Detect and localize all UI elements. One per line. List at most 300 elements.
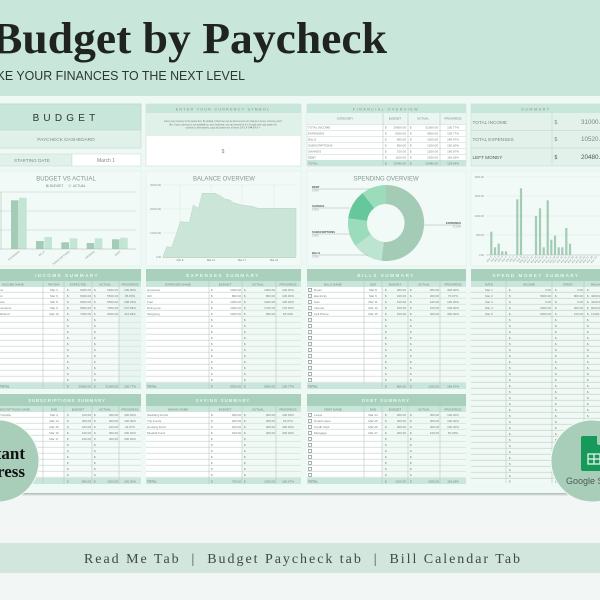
- table: debt summary: $: [385, 480, 387, 484]
- table: subscriptions summary: $: [67, 431, 69, 435]
- table: spend money summary: $$$$$$$$$$$$$$$$$$$$$$$$$$$$: [587, 318, 589, 484]
- table: spend money summary: $: [509, 306, 511, 310]
- table: expenses summary: 800.00: [266, 294, 275, 298]
- table: spend money summary: DATE: [485, 282, 493, 286]
- table: income summary: nvestors: [0, 306, 12, 310]
- table: bills summary: Internet: [314, 306, 324, 310]
- table: debt summary: $: [410, 413, 412, 417]
- table: debt summary: Loans: [314, 413, 323, 417]
- panel: financial overview: DEBT: [308, 156, 316, 160]
- table: subscriptions summary: $: [94, 419, 96, 423]
- table: debt summary: PROGRESS: [444, 408, 462, 412]
- table: bills summary: $: [385, 306, 387, 310]
- chart: spending overview donut: EXPENSES: [446, 221, 461, 225]
- table: subscriptions summary: $: [67, 480, 69, 484]
- table: income summary: $: [67, 384, 69, 388]
- table: bills summary: $: [385, 294, 387, 298]
- panel: summary: $: [554, 137, 558, 143]
- panel: financial overview: 1200.00: [427, 150, 438, 154]
- table: bills summary: 300.00: [430, 288, 439, 292]
- table: debt summary: TOTAL: [308, 480, 318, 484]
- table: income summary: PAYDAY: [48, 282, 60, 286]
- table: income summary: 108.33%: [124, 300, 136, 304]
- table: bills summary: 200.00: [430, 294, 439, 298]
- chart: balance overview: 10000.00: [150, 231, 162, 235]
- table: expenses summary: 1700.00: [264, 306, 275, 310]
- table: spend money summary: INCOME: [523, 282, 535, 286]
- footer band: [0, 543, 600, 573]
- badge: instant express: [0, 420, 39, 502]
- table: income summary: $: [67, 294, 69, 298]
- table: spend money summary: 300.00: [574, 306, 583, 310]
- table: bills summary: 800.00: [397, 384, 406, 388]
- table: subscriptions summary: 100.00: [109, 425, 118, 429]
- table: bills summary: Mar 9: [369, 294, 377, 298]
- chart: spend money bars: Mar 28: [586, 255, 594, 264]
- table: subscriptions summary: DUE: [51, 408, 57, 412]
- table: saving summary: $: [244, 425, 246, 429]
- table: saving summary: PROGRESS: [279, 408, 297, 412]
- panel: financial overview: $: [385, 150, 387, 154]
- table: spend money summary: $: [555, 288, 557, 292]
- panel: financial overview: $: [410, 144, 412, 148]
- panel: financial overview: $: [410, 132, 412, 136]
- table: spend money summary: 100.00: [574, 312, 583, 316]
- table: bills summary: 70.07%: [448, 294, 458, 298]
- table: expenses summary: $: [211, 306, 213, 310]
- table: expenses summary: $: [211, 288, 213, 292]
- chart: spend money bars: Mar 12: [526, 255, 534, 264]
- table: subscriptions summary: 300.00%: [124, 431, 136, 435]
- table: saving summary: 100.00: [232, 431, 241, 435]
- chart: balance overview: [146, 171, 301, 266]
- chart: spend money bars: 1000.00: [475, 214, 485, 218]
- table: bills summary: 1200.00: [428, 384, 439, 388]
- table: bills summary: BILLS NAME: [324, 282, 342, 286]
- table: bills summary: 100.00%: [447, 300, 459, 304]
- table: expenses summary: Gift: [147, 294, 152, 298]
- table: bills summary: 100.00: [397, 306, 406, 310]
- table: income summary: $: [67, 300, 69, 304]
- table: expenses summary: $: [244, 312, 246, 316]
- chart: spending overview donut: 5.56%: [312, 256, 320, 258]
- table: expenses summary: Dining out: [147, 306, 161, 310]
- chart: spend money bars: Mar 4: [496, 255, 504, 263]
- table: bills summary: 148.97%: [447, 384, 459, 388]
- panel: financial overview: 105.77%: [447, 132, 459, 136]
- table: saving summary: TOTAL: [147, 480, 157, 484]
- panel: financial overview: $: [385, 156, 387, 160]
- panel: financial overview: $: [410, 150, 412, 154]
- table: bills summary: 100.00: [430, 306, 439, 310]
- chart: spend money bars: Mar 8: [511, 255, 519, 263]
- panel: budget title: PAYCHECK DASHBOARD: [37, 137, 95, 143]
- table: expenses summary: BUDGET: [219, 282, 231, 286]
- panel: summary: $: [554, 155, 558, 161]
- table: spend money summary: $: [587, 288, 589, 292]
- table: spend money summary: 0.00: [545, 300, 551, 304]
- table: bills summary: $: [385, 312, 387, 316]
- chart: spend money bars: [471, 171, 600, 266]
- table: debt summary: BUDGET: [389, 408, 401, 412]
- table: debt summary: 300.00: [397, 419, 406, 423]
- table: debt summary: $: [410, 419, 412, 423]
- table: subscriptions summary: Youtube: [0, 413, 11, 417]
- table: saving summary: SAVING NAME: [168, 408, 188, 412]
- table: subscriptions summary: $: [67, 425, 69, 429]
- table: expenses summary: $: [211, 384, 213, 388]
- panel: financial overview: 800.00: [397, 144, 406, 148]
- panel: financial overview: $: [385, 144, 387, 148]
- table: income summary: ns: [0, 288, 4, 292]
- table: income summary: $: [94, 312, 96, 316]
- chart: spend money bars: Mar 21: [560, 255, 568, 264]
- table: spend money summary: $: [555, 312, 557, 316]
- chart: spend money bars: Mar 15: [537, 255, 545, 264]
- table: subscriptions summary: $: [94, 413, 96, 417]
- table: saving summary: 300.00: [266, 413, 275, 417]
- chart: balance overview: Mar 8: [177, 258, 184, 262]
- panel: financial overview: 29500.00: [393, 126, 406, 130]
- table: bills summary: 300.00: [397, 288, 406, 292]
- table: bills summary: $: [410, 294, 412, 298]
- table: income summary: 6000.00: [107, 288, 118, 292]
- table: debt summary: [307, 394, 466, 484]
- table: income summary: 31000.00: [105, 384, 118, 388]
- table: expenses summary: $: [244, 294, 246, 298]
- table: income summary: 5500.00: [107, 294, 118, 298]
- panel: budget title: [0, 104, 141, 148]
- panel: financial overview: 5500.00: [427, 132, 438, 136]
- table: debt summary: 300.00: [397, 413, 406, 417]
- table: income summary: Refund: [0, 312, 10, 316]
- table: expenses summary: EXPENSES SUMMARY: [186, 273, 260, 278]
- panel: financial overview: [307, 104, 466, 166]
- table: subscriptions summary: 300.00%: [124, 437, 136, 441]
- table: saving summary: $: [211, 419, 213, 423]
- table: spend money summary: SPEND MONEY SUMMARY: [492, 273, 580, 278]
- table: expenses summary: $: [244, 306, 246, 310]
- table: bills summary: $: [385, 384, 387, 388]
- table: spend money summary: Mar 2: [485, 294, 493, 298]
- table: bills summary: BUDGET: [389, 282, 401, 286]
- chart: spend money bars: Mar 10: [518, 255, 527, 264]
- chart: budget vs actual: BILLS: [38, 249, 46, 257]
- table: spend money summary: $: [509, 294, 511, 298]
- table: subscriptions summary: 100.00: [82, 413, 91, 417]
- table: bills summary: 100.00: [397, 300, 406, 304]
- table: income summary: $: [67, 312, 69, 316]
- panel: financial overview: 166.67%: [447, 150, 459, 154]
- chart: balance overview: Mar 12: [207, 258, 216, 262]
- table: subscriptions summary: ACTUAL: [99, 408, 111, 412]
- panel: currency symbol: ENTER YOUR CURRENCY SYMBOL: [176, 107, 270, 111]
- table: income summary: $: [67, 288, 69, 292]
- table: income summary: 100.00%: [124, 288, 136, 292]
- table: income summary: INCOME SUMMARY: [35, 273, 99, 278]
- panel: financial overview: 800.00: [397, 138, 406, 142]
- table: debt summary: Mar 26: [368, 425, 378, 429]
- chart: budget vs actual: EXPENSES: [7, 249, 21, 261]
- table: income summary: $: [94, 306, 96, 310]
- table: spend money summary: $: [555, 294, 557, 298]
- panel: financial overview: PROGRESS: [444, 116, 462, 120]
- table: subscriptions summary: 300.00%: [124, 413, 136, 417]
- table: bills summary: Mar 15: [368, 312, 378, 316]
- table: saving summary: [146, 394, 301, 484]
- table: income summary: 6500.00: [80, 306, 91, 310]
- table: income summary: 6000.00: [80, 294, 91, 298]
- table: debt summary: $: [385, 425, 387, 429]
- table: expenses summary: 950.00: [266, 312, 275, 316]
- table: saving summary: Trip Funds: [147, 419, 162, 423]
- panel: financial overview: 1200.00: [427, 144, 438, 148]
- table: expenses summary: [146, 269, 301, 389]
- table: saving summary: 33.07%: [283, 419, 293, 423]
- chart: spending overview donut: 5.56%: [312, 190, 320, 192]
- panel: financial overview: $: [410, 156, 412, 160]
- table: debt summary: 200.00: [397, 431, 406, 435]
- panel: financial overview: ACTUAL: [417, 116, 429, 120]
- table: bills summary: 100.00: [430, 300, 439, 304]
- table: spend money summary: $: [509, 312, 511, 316]
- panel: financial overview: $: [410, 126, 412, 130]
- table: saving summary: $: [244, 480, 246, 484]
- chart: spending overview donut: DEBT: [312, 185, 320, 189]
- table: spend money summary: 0.00: [545, 288, 551, 292]
- table: income summary: [0, 269, 141, 389]
- chart: spend money bars: Mar 29: [590, 255, 598, 264]
- table: bills summary: 300.00: [430, 312, 439, 316]
- chart: budget vs actual: SUBSCRIPTIONS: [51, 249, 71, 266]
- table: income summary: ess: [0, 300, 5, 304]
- table: bills summary: Mar 12: [368, 306, 378, 310]
- table: subscriptions summary: $: [94, 425, 96, 429]
- header banner: [0, 0, 600, 96]
- chart: balance overview: Mar 24: [270, 258, 279, 262]
- table: expenses summary: $: [244, 384, 246, 388]
- table: subscriptions summary: $: [94, 437, 96, 441]
- panel: currency symbol: like. If your currency is not available on your keyboard, you can search for it in Google and copy paste the: [169, 123, 277, 126]
- panel: financial overview: CATEGORY: [337, 116, 353, 120]
- chart: spending overview donut: BILLS: [312, 251, 320, 255]
- table: debt summary: $: [410, 480, 412, 484]
- table: expenses summary: 1000.00: [230, 312, 241, 316]
- table: debt summary: 1100.00: [395, 480, 406, 484]
- table: bills summary: $: [410, 300, 412, 304]
- panel: summary: TOTAL EXPENSES: [472, 137, 514, 142]
- panel: financial overview: 19780.00: [393, 162, 406, 166]
- table: expenses summary: 1000.00: [230, 300, 241, 304]
- table: income summary: 6000.00: [107, 312, 118, 316]
- table: saving summary: $: [244, 419, 246, 423]
- table: debt summary: DUE: [370, 408, 376, 412]
- table: subscriptions summary: 300.00: [109, 437, 118, 441]
- table: bills summary: 100.00: [397, 294, 406, 298]
- table: subscriptions summary: $$$$$$: [67, 443, 69, 477]
- chart: budget vs actual: ACTUAL: [73, 184, 86, 188]
- table: income summary: 6500.00: [107, 300, 118, 304]
- table: debt summary: $: [410, 431, 412, 435]
- footer tabs text: Read Me Tab | Budget Paycheck tab | Bill Calendar Tab: [84, 552, 520, 567]
- chart: balance overview: 20000.00: [150, 207, 162, 211]
- table: debt summary: 118.18%: [447, 480, 459, 484]
- table: spend money summary: Mar 4: [485, 306, 493, 310]
- table: income summary: 105.77%: [124, 384, 136, 388]
- table: expenses summary: 170.00%: [282, 306, 294, 310]
- chart: balance overview: 30000.00: [150, 183, 162, 187]
- table: expenses summary: 105.77%: [282, 384, 294, 388]
- table: income summary: 107.69%: [124, 306, 136, 310]
- table: expenses summary: $: [244, 288, 246, 292]
- table: income summary: $: [94, 294, 96, 298]
- panel: financial overview: BUDGET: [389, 116, 401, 120]
- table: saving summary: ACTUAL: [252, 408, 264, 412]
- table: spend money summary: $: [555, 300, 557, 304]
- table: income summary: Mar 9: [50, 306, 58, 310]
- table: bills summary: $: [410, 312, 412, 316]
- dashboard sheet background: [0, 96, 600, 493]
- panel: financial overview: 150.00%: [447, 144, 459, 148]
- table: bills summary: [307, 269, 466, 389]
- table: subscriptions summary: $: [94, 431, 96, 435]
- chart: spend money bars: Mar 19: [552, 255, 560, 264]
- table: debt summary: $: [385, 419, 387, 423]
- table: subscriptions summary: $: [67, 413, 69, 417]
- table: bills summary: $: [410, 288, 412, 292]
- table: subscriptions summary: 100.00: [82, 431, 91, 435]
- chart: spend money bars: Mar 5: [500, 255, 508, 263]
- chart: spend money bars: Mar 25: [575, 255, 583, 264]
- panel: starting date: March 1: [97, 158, 115, 164]
- chart: spending overview donut: SPENDING OVERVIEW: [353, 176, 419, 182]
- table: bills summary: 300.00%: [447, 288, 459, 292]
- table: saving summary: $: [211, 431, 213, 435]
- table: income summary: 7000.00: [80, 312, 91, 316]
- table: subscriptions summary: 300.00: [109, 413, 118, 417]
- table: expenses summary: 100.00%: [282, 288, 294, 292]
- table: saving summary: 100.00: [232, 425, 241, 429]
- table: income summary: TOTAL: [0, 384, 10, 388]
- chart: budget vs actual: BUDGET: [50, 184, 63, 188]
- table: subscriptions summary: 150.00%: [124, 480, 136, 484]
- table: debt summary: Mortgage: [314, 431, 327, 435]
- chart: balance overview: 0.00: [156, 255, 162, 259]
- table: subscriptions summary: SUBSCRIPTIONS SUMMARY: [28, 398, 106, 403]
- panel: financial overview: 1100.00: [395, 156, 406, 160]
- table: saving summary: $: [211, 480, 213, 484]
- chart: spending overview donut: SAVINGS: [312, 204, 325, 208]
- icon: google sheets: [581, 436, 600, 471]
- panel: summary: SUMMARY: [521, 107, 551, 111]
- table: saving summary: $: [211, 425, 213, 429]
- table: expenses summary: 1000.00: [230, 288, 241, 292]
- table: bills summary: $: [410, 306, 412, 310]
- panel: summary: [471, 104, 600, 166]
- table: income summary: Mar 6: [50, 294, 58, 298]
- table: bills summary: PROGRESS: [444, 282, 462, 286]
- table: expenses summary: 1000.00: [264, 300, 275, 304]
- table: saving summary: $: [244, 413, 246, 417]
- chart: spending overview donut: [307, 171, 466, 266]
- table: subscriptions summary: 300.00: [109, 431, 118, 435]
- panel: currency symbol: $: [222, 149, 225, 155]
- table: debt summary: 300.00: [430, 425, 439, 429]
- chart: spend money bars: Mar 20: [556, 255, 564, 264]
- table: bills summary: TOTAL: [308, 384, 318, 388]
- table: income summary: PROGRESS: [121, 282, 139, 286]
- table: bills summary: 100.00: [397, 312, 406, 316]
- table: saving summary: 300.00: [266, 431, 275, 435]
- chart: spend money bars: 500.00: [476, 233, 485, 237]
- table: subscriptions summary: PROGRESS: [121, 408, 139, 412]
- panel: summary: TOTAL INCOME: [472, 120, 507, 125]
- table: subscriptions summary: 33.07%: [125, 425, 135, 429]
- table: debt summary: 50.00%: [448, 431, 458, 435]
- table: debt summary: Small Loans: [314, 419, 331, 423]
- table: expenses summary: 5200.00: [230, 384, 241, 388]
- panel: budget title: BUDGET: [33, 113, 99, 124]
- table: subscriptions summary: 300.00: [109, 419, 118, 423]
- table: expenses summary: $$$$$$$$$$$: [244, 318, 246, 382]
- table: saving summary: Wedding Funds: [147, 413, 168, 417]
- table: income summary: 7000.00: [107, 306, 118, 310]
- chart: spend money bars: Mar 9: [515, 255, 523, 263]
- table: saving summary: 300.00: [232, 413, 241, 417]
- chart: spend money bars: Mar 7: [508, 255, 516, 263]
- table: saving summary: 300.00%: [282, 425, 294, 429]
- table: subscriptions summary: Mar 17: [49, 437, 59, 441]
- table: saving summary: 720.00: [232, 480, 241, 484]
- table: debt summary: $$$$$$$: [385, 437, 387, 477]
- panel: financial overview: BILLS: [308, 138, 316, 142]
- panel: currency symbol: Enter your currency in the below box. By default, it has been set as Aus but you can change it to any currency you'd: [164, 120, 282, 123]
- table: saving summary: $$$$$$$: [244, 437, 246, 477]
- table: saving summary: $$$$$$$: [211, 437, 213, 477]
- table: subscriptions summary: 100.00: [82, 425, 91, 429]
- panel: financial overview: TOTAL INCOME: [308, 126, 330, 130]
- chart: budget vs actual: BUDGET VS ACTUAL: [36, 176, 96, 182]
- chart: spend money bars: Mar 13: [530, 255, 538, 264]
- table: spend money summary: 0.00: [577, 288, 583, 292]
- table: income summary: INCOME NAME: [2, 282, 24, 286]
- table: bills summary: $$$$$$$$$$$: [385, 318, 387, 382]
- table: debt summary: $: [410, 425, 412, 429]
- title: Budget by Paycheck: [0, 14, 388, 63]
- table: spend money summary: $: [587, 306, 589, 310]
- table: subscriptions summary: $$$$$$: [94, 443, 96, 477]
- table: saving summary: 300.00: [266, 425, 275, 429]
- table: expenses summary: 95.00%: [283, 312, 293, 316]
- table: debt summary: Credit Card: [314, 425, 330, 429]
- table: expenses summary: Groceries: [147, 288, 161, 292]
- table: income summary: 114.29%: [124, 312, 136, 316]
- table: subscriptions summary: $: [67, 419, 69, 423]
- panel: summary: LEFT MONEY: [472, 155, 503, 160]
- table: spend money summary: $: [509, 300, 511, 304]
- chart: spend money bars: Mar 18: [548, 255, 557, 264]
- table: debt summary: 300.00: [430, 419, 439, 423]
- panel: summary: $: [554, 120, 558, 126]
- table: subscriptions summary: $: [94, 480, 96, 484]
- chart: spend money bars: Mar 6: [504, 255, 512, 263]
- panel: starting date: [0, 154, 141, 166]
- table: expenses summary: 100.00%: [282, 300, 294, 304]
- table: expenses summary: Fuel: [147, 300, 153, 304]
- table: subscriptions summary: $: [67, 437, 69, 441]
- chart: spend money bars: Mar 16: [541, 255, 549, 264]
- chart: spend money bars: Mar 26: [578, 255, 587, 264]
